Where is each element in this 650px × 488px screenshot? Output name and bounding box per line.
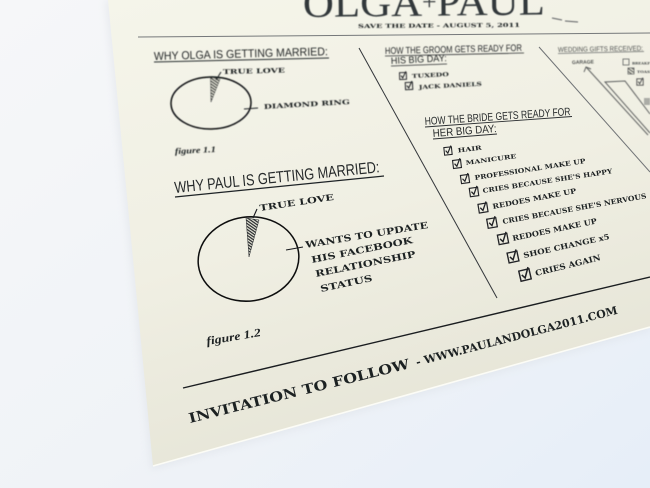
label: facebook status: RELATIONSHIP [315, 250, 417, 280]
bar [605, 81, 650, 133]
save the date: SAVE THE DATE - AUGUST 5, 2011 [358, 23, 520, 30]
heading: bride: HOW THE BRIDE GETS READY FOR [424, 106, 571, 128]
footer: invitation to follow: INVITATION TO FOLLOW [187, 356, 412, 427]
heading: why paul: WHY PAUL IS GETTING MARRIED: [174, 159, 380, 197]
label: facebook status: HIS FACEBOOK [311, 236, 415, 266]
axis arrow [584, 67, 648, 135]
caption: figure 1.1: figure 1.1 [175, 144, 216, 156]
item: tuxedo: TUXEDO [412, 72, 449, 80]
item: professional make up [460, 157, 586, 184]
footer: invitation to follow [187, 304, 619, 427]
heading: groom [385, 43, 524, 67]
item: manicure: MANICURE [465, 153, 517, 167]
caption: figure 1.2: figure 1.2 [206, 327, 262, 348]
item: shoe change [507, 232, 610, 263]
item: hair [444, 144, 483, 155]
item: cries again [518, 252, 602, 281]
heading: why olga: WHY OLGA IS GETTING MARRIED: [154, 46, 328, 63]
small header mark [552, 18, 578, 22]
item: redoes make up again: REDOES MAKE UP [512, 216, 598, 243]
heading: groom: HOW THE GROOM GETS READY FOR [385, 43, 522, 57]
label: diamond ring: DIAMOND RING [264, 98, 351, 111]
footer: invitation to follow: - WWW.PAULANDOLGA2011.COM [414, 304, 619, 369]
heading: bride: HER BIG DAY: [432, 123, 497, 140]
heading: groom: HIS BIG DAY: [391, 53, 447, 67]
bottom rule [183, 277, 650, 388]
item: cries again: CRIES AGAIN [534, 252, 602, 278]
panel: header [303, 0, 578, 30]
item: redoes make up [478, 186, 578, 213]
label: facebook status: STATUS [320, 274, 373, 295]
item: professional make up: PROFESSIONAL MAKE UP [474, 157, 586, 182]
item: cries because happy: CRIES BECAUSE SHE'S HAPPY [482, 167, 613, 195]
label: true love: TRUE LOVE [259, 193, 335, 214]
label: true love: TRUE LOVE [223, 66, 285, 76]
item: redoes make up: REDOES MAKE UP [492, 186, 578, 211]
panel: why paul [174, 159, 429, 348]
panel: wedding gifts chart [558, 46, 650, 135]
card [108, 0, 650, 466]
item: hair: HAIR [457, 144, 483, 154]
heading: bride [424, 106, 572, 140]
panel: groom checklist [385, 43, 524, 91]
panel: bride checklist [424, 106, 647, 281]
item: jack daniels: JACK DANIELS [417, 82, 482, 91]
item: cries because nervous: CRIES BECAUSE SHE'S NERVOUS [502, 191, 647, 226]
legend: TOAS [637, 69, 650, 74]
pie chart 1.1 [171, 72, 258, 130]
axis label: garage: GARAGE [572, 59, 595, 66]
pie chart 1.2 [193, 209, 304, 308]
item: cries because happy [469, 167, 613, 197]
label: facebook status [304, 221, 429, 295]
item: shoe change: SHOE CHANGE x5 [522, 232, 610, 260]
legend [623, 59, 650, 105]
label: facebook status: WANTS TO UPDATE [304, 221, 429, 251]
panel: why olga [154, 46, 351, 156]
item: manicure [452, 153, 517, 168]
